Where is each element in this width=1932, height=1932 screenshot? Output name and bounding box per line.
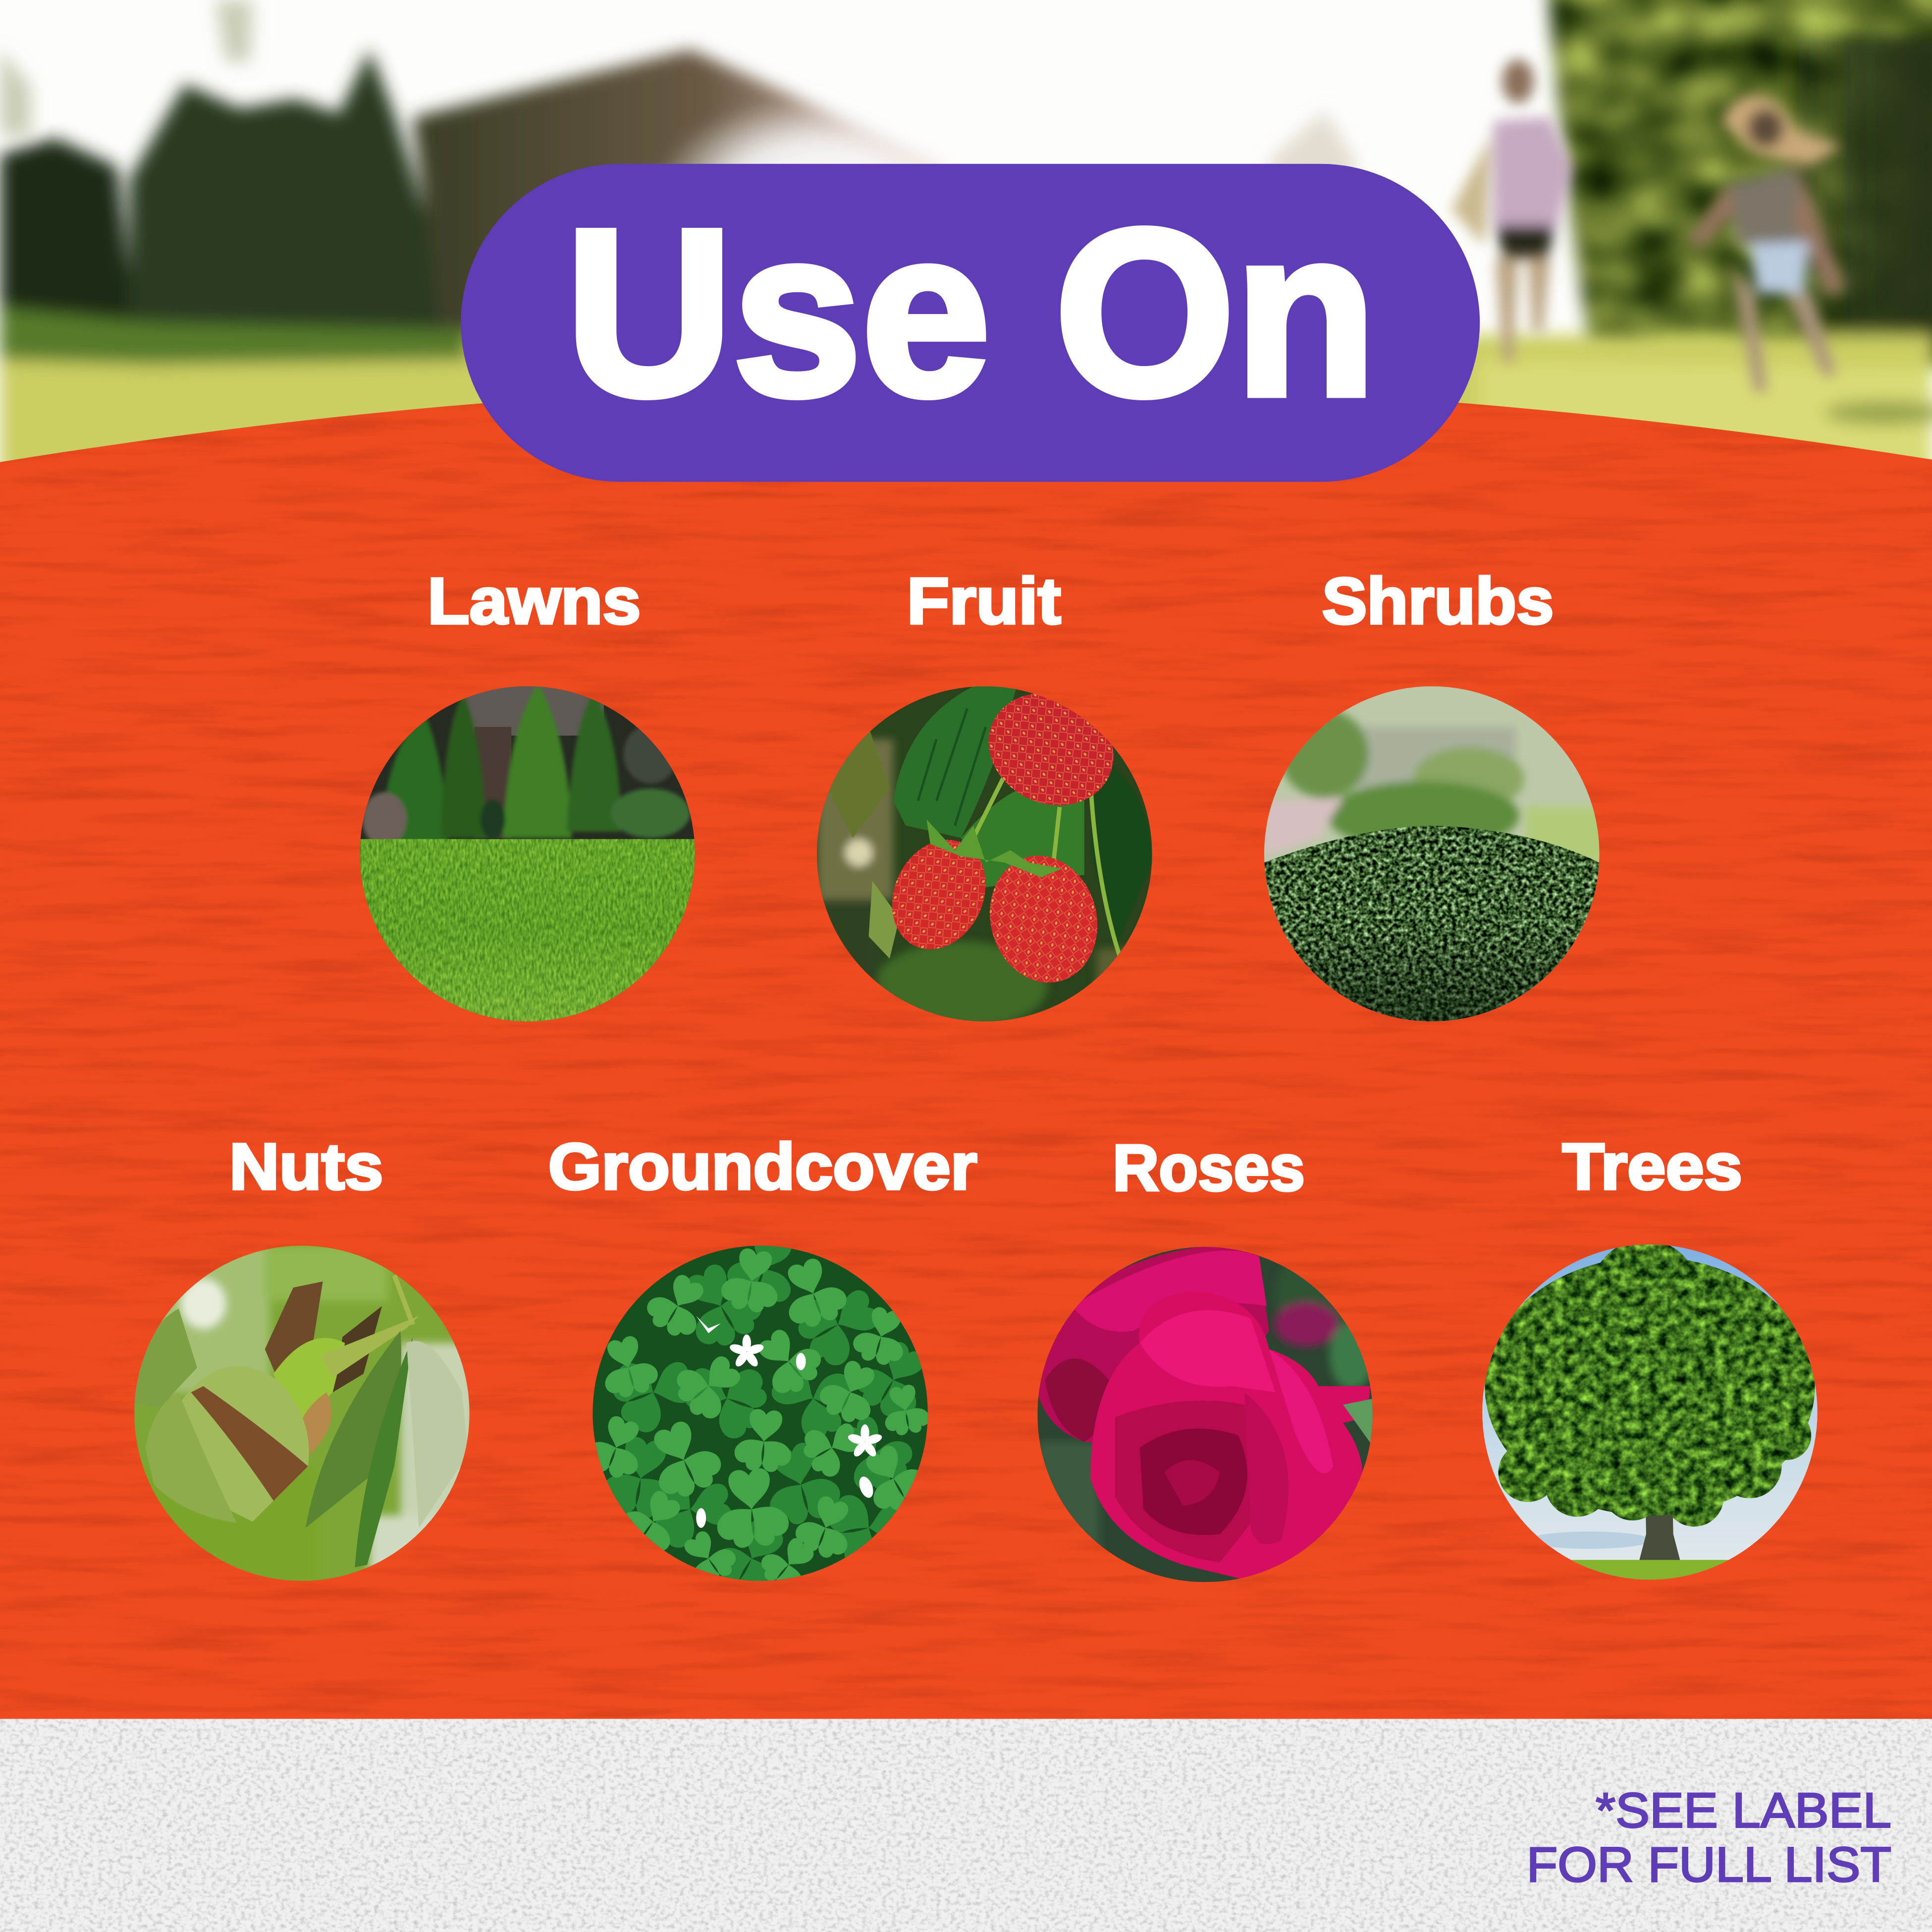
background photo: blurred yard with children running (0, 0, 1932, 493)
item: Groundcover (548, 1130, 977, 1605)
textured white wall footer (0, 1719, 1932, 1932)
title pill: Use On (461, 164, 1480, 482)
item: Roses: Roses (1113, 1131, 1305, 1204)
white flowers (696, 1316, 883, 1528)
child right (1688, 95, 1846, 392)
item: Lawns: Lawns (428, 565, 641, 638)
photo: pecan nut (134, 1246, 475, 1590)
item: Fruit (817, 565, 1152, 1030)
footnote: see label for full list: FOR FULL LIST (1527, 1837, 1891, 1892)
item: Fruit: Fruit (907, 565, 1061, 638)
item: Trees (1482, 1130, 1818, 1585)
strawberry top (970, 673, 1132, 825)
photo: trimmed shrub (1264, 686, 1611, 1022)
left nut (134, 1308, 197, 1407)
orange wood-texture panel with arched top (0, 383, 1932, 1720)
photo: lawn (360, 684, 695, 1021)
item: Shrubs (1264, 565, 1611, 1022)
strawberry left (875, 824, 1003, 965)
item: Trees: Trees (1562, 1130, 1742, 1203)
photo: oak tree (1482, 1239, 1818, 1585)
photo: pink rose (1037, 1245, 1374, 1582)
photo: strawberries (817, 673, 1152, 1030)
item: Shrubs: Shrubs (1322, 565, 1554, 638)
title pill: Use On: Use On (566, 181, 1376, 445)
item: Nuts: Nuts (229, 1130, 383, 1203)
leaves (306, 1331, 401, 1528)
item: Nuts (134, 1130, 475, 1590)
item: Roses (1037, 1131, 1374, 1582)
photo: clover (581, 1223, 940, 1605)
item: Groundcover: Groundcover (548, 1130, 977, 1203)
item: Lawns (360, 565, 695, 1021)
child left (1451, 59, 1572, 364)
footnote: see label for full list (1527, 1783, 1891, 1892)
strawberry right (976, 844, 1111, 995)
footnote: see label for full list: *SEE LABEL (1596, 1783, 1891, 1838)
